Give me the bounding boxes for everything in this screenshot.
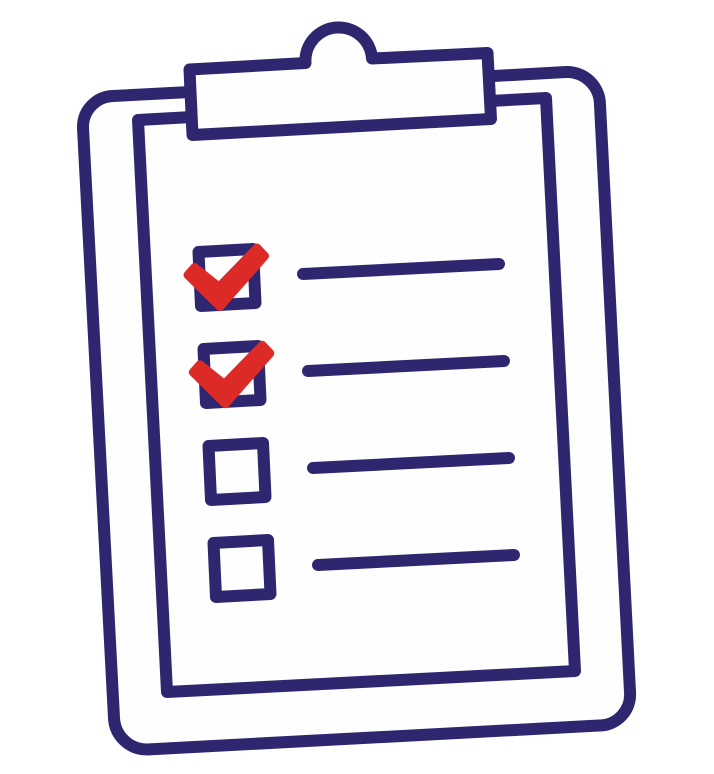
list line 2	[308, 361, 504, 371]
checkbox 1	[198, 249, 256, 306]
red check 2	[193, 345, 270, 404]
list line 3	[313, 458, 509, 468]
checkbox 3	[208, 443, 266, 500]
list line 4	[318, 555, 514, 565]
list line 1	[303, 264, 499, 274]
checkbox 4	[214, 540, 270, 597]
red check 1	[188, 248, 265, 307]
clip	[190, 27, 491, 135]
paper sheet	[138, 98, 575, 692]
checkbox 2	[204, 346, 260, 403]
clipboard board	[83, 72, 630, 749]
